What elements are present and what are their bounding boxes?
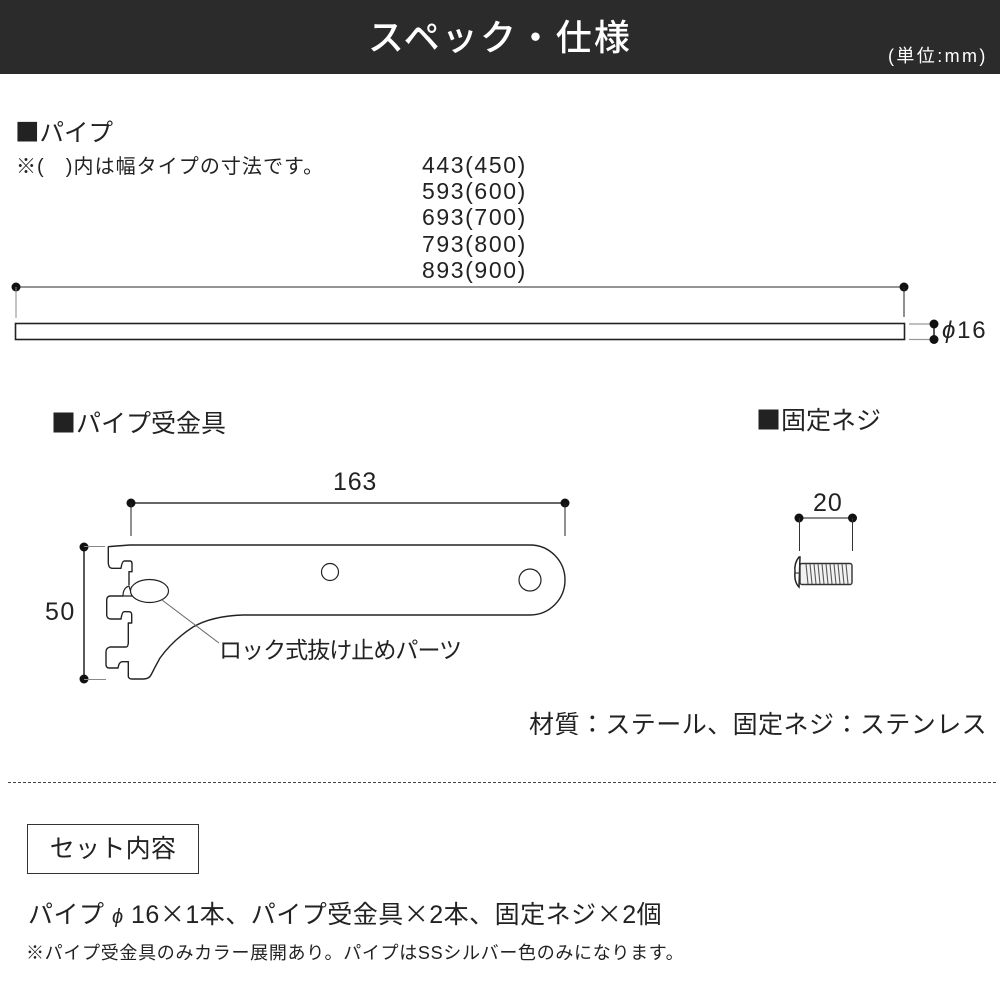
heading: fixing screw: ■固定ネジ [756, 401, 881, 437]
label: pipe diameter: ϕ16 [942, 317, 987, 344]
unit note: (単位:mm) [888, 46, 988, 66]
pipe length list: 443(450) [422, 152, 527, 178]
note: width type: ※( )内は幅タイプの寸法です。 [16, 156, 324, 178]
pipe length list: 893(900) [422, 257, 527, 283]
label: bracket length 163: 163 [333, 468, 377, 496]
pipe length list: 693(700) [422, 204, 527, 230]
pipe length list [422, 152, 527, 283]
set contents box [27, 824, 199, 874]
dashed divider [8, 782, 996, 783]
footnote: ※パイプ受金具のみカラー展開あり。パイプはSSシルバー色のみになります。 [26, 943, 684, 963]
pipe length list: 593(600) [422, 178, 527, 204]
header band [0, 0, 1000, 74]
set contents list: パイプ ϕ 16×1本、パイプ受金具×2本、固定ネジ×2個 [28, 895, 662, 931]
pipe length list: 793(800) [422, 231, 527, 257]
label: lock part: ロック式抜け止めパーツ [219, 637, 461, 663]
heading: pipe: ■パイプ [15, 114, 113, 149]
material text: 材質：ステール、固定ネジ：ステンレス [529, 711, 987, 739]
label: bracket height 50: 50 [45, 598, 76, 626]
heading: pipe bracket: ■パイプ受金具 [51, 404, 226, 440]
label: screw length 20: 20 [813, 489, 843, 517]
set contents label: セット内容 [50, 835, 176, 863]
title: スペック・仕様 [368, 17, 632, 58]
